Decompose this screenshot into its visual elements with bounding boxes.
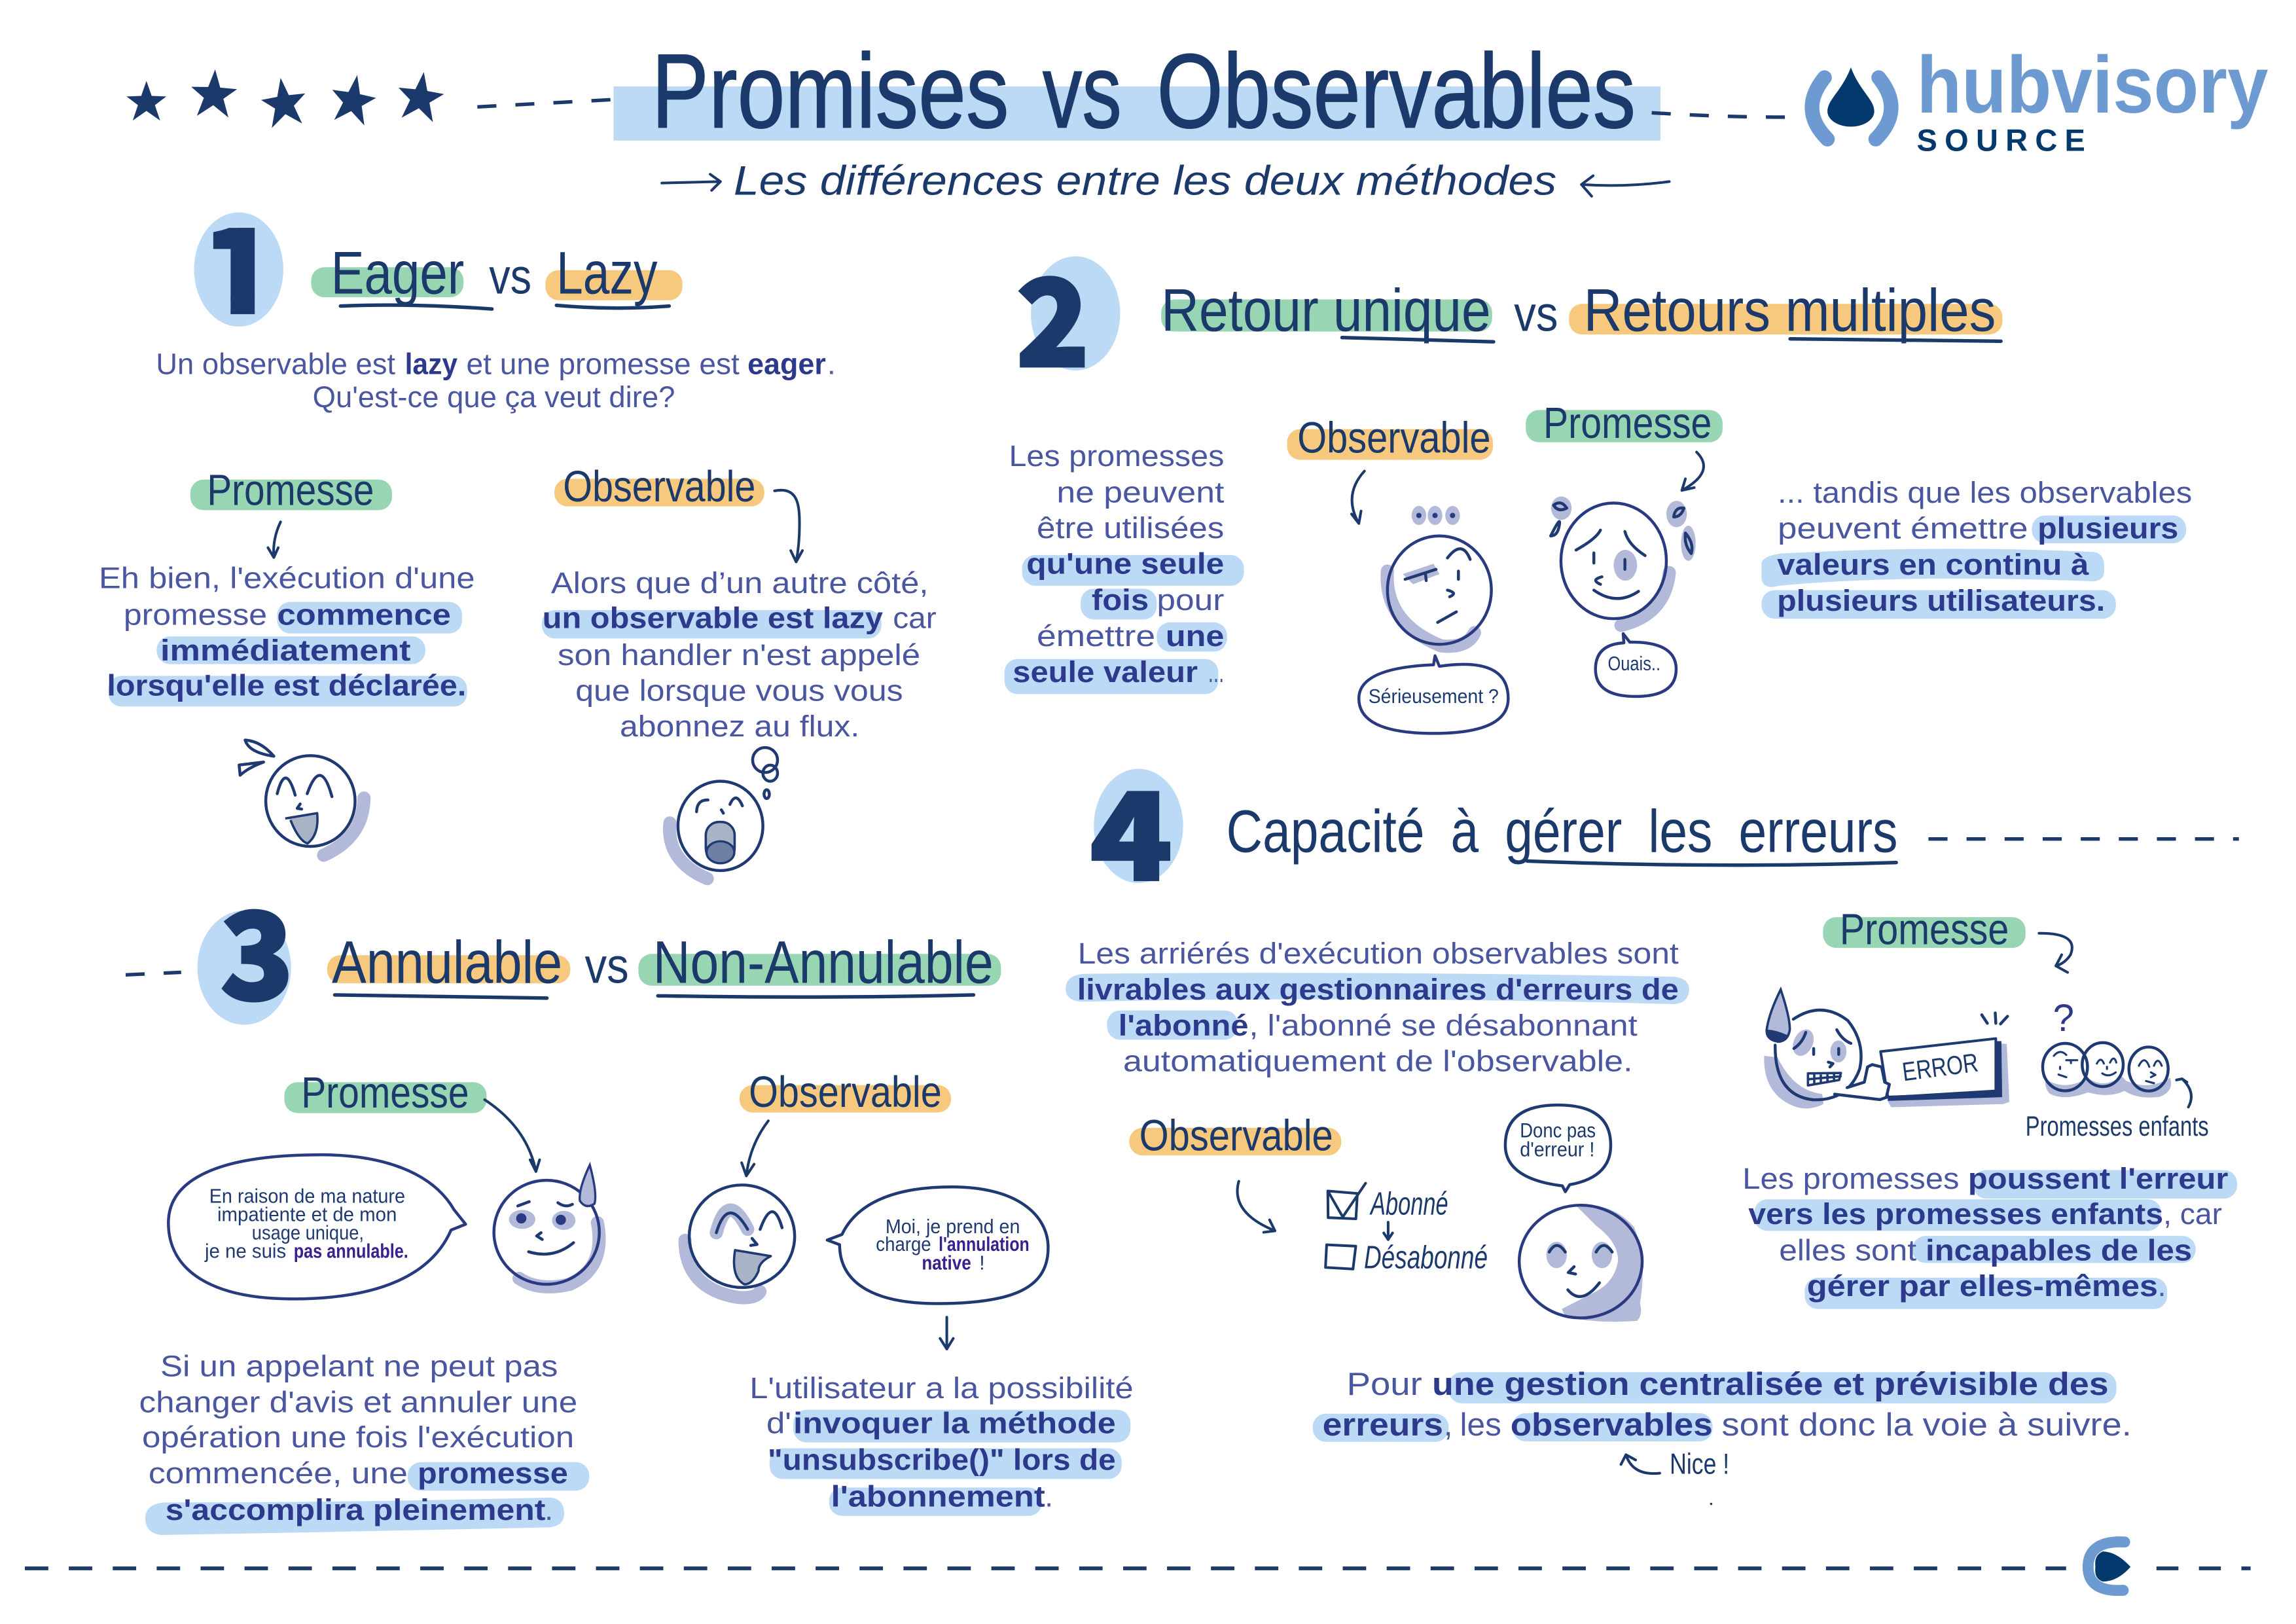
heading: retour unique vs retours multiples: Retours multiples [1584, 278, 1996, 344]
title: vs [1043, 33, 1122, 151]
text: observable lazy: Alors que d’un autre côté, [551, 566, 928, 600]
intro text: et une promesse est [467, 347, 740, 381]
label: promesses enfants: Promesses enfants [2026, 1111, 2209, 1142]
conclusion text: erreurs [1323, 1407, 1443, 1443]
tag: promesse: Promesse [207, 465, 374, 514]
heading: annulable vs non-annulable: Non-Annulable [653, 929, 994, 996]
text: observable lazy: car [893, 601, 937, 635]
text: promesse eager: commence [278, 597, 451, 631]
text: unsubscribe [749, 1371, 1134, 1516]
text: promesse s'accomplira: changer d'avis et annuler une [139, 1384, 577, 1418]
callout: annulation native [827, 1187, 1048, 1304]
text: promesses errors: elles sont [1779, 1233, 1916, 1267]
callout: annulation native: l'annulation [939, 1234, 1030, 1255]
text: unsubscribe: "unsubscribe()" lors de [768, 1442, 1116, 1476]
tag: observable: Observable [1297, 413, 1491, 462]
heading: eager vs lazy [311, 240, 683, 309]
heading: annulable vs non-annulable: vs [585, 939, 629, 994]
label: nice: Nice ! [1670, 1447, 1729, 1480]
arrow: callout to text [940, 1317, 953, 1349]
text: promesses errors: . [2158, 1269, 2166, 1303]
conclusion text: une gestion centralisée et prévisible des [1432, 1366, 2109, 1402]
text: unsubscribe: l'abonnement [831, 1479, 1045, 1513]
tag: promesse: Promesse [1840, 905, 2009, 954]
logo: small mark [2088, 1542, 2130, 1591]
intro text: eager [747, 347, 826, 381]
text: observables: ... tandis que les observables [1778, 475, 2192, 509]
text: observables: valeurs en continu à [1777, 547, 2089, 581]
heading: eager vs lazy: Eager [331, 240, 464, 307]
heading: retour unique vs retours multiples [1161, 278, 2002, 344]
text: observables [1761, 475, 2192, 619]
arrow: subtitle right [1581, 175, 1669, 196]
heading: retour unique vs retours multiples: Retour unique [1161, 278, 1491, 344]
tag: observable: Observable [563, 462, 755, 511]
number 2: 2 [1016, 226, 1089, 401]
text: promesses: fois [1092, 583, 1149, 617]
arrow: promesse to children [2039, 933, 2072, 972]
text: promesse eager: promesse [124, 597, 267, 631]
text: promesse s'accomplira [139, 1349, 589, 1535]
tag: observable: Observable [1139, 1111, 1333, 1161]
callout: serieusement: Sérieusement ? [1369, 686, 1499, 708]
heading: capacite a gerer les erreurs: Capacité à gérer les erreurs [1227, 799, 1897, 865]
tag: promesse: Promesse [301, 1068, 469, 1117]
text: observables: plusieurs [2037, 511, 2178, 545]
text: observables errors [1066, 936, 1689, 1078]
arrow: promesse to face [1682, 452, 1704, 490]
icon: skeptical face [1387, 506, 1492, 646]
title [652, 33, 1636, 151]
text: observables errors: livrables aux gestionnaires d'erreurs de [1077, 972, 1679, 1006]
text: promesses errors: gérer par elles-mêmes [1807, 1269, 2158, 1303]
checklist: abonne to desabonne [1325, 1183, 1488, 1276]
text: promesses errors: , car [2163, 1197, 2222, 1231]
heading: eager vs lazy: vs [489, 249, 531, 305]
text: promesse s'accomplira: promesse [418, 1456, 568, 1490]
conclusion text: les [1460, 1407, 1501, 1443]
text: promesses: ne peuvent [1056, 475, 1225, 509]
arrow: promesse to text [268, 522, 281, 558]
logo: hubvisory source [1812, 41, 2268, 157]
text: observable lazy: un observable est lazy [543, 601, 884, 635]
callout: annulation native: ! [979, 1252, 985, 1274]
text: promesses errors [1742, 1161, 2237, 1309]
text: promesses errors: poussent l'erreur [1968, 1161, 2229, 1195]
heading: retour unique vs retours multiples: vs [1514, 287, 1558, 342]
callout: pas annulable: usage unique, [252, 1223, 364, 1244]
text: promesses: émettre [1037, 619, 1155, 653]
title highlight [613, 86, 1660, 141]
number 1: 1 [205, 175, 278, 349]
intro text [156, 347, 836, 414]
checklist: abonne to desabonne: Désabonné [1364, 1240, 1488, 1276]
icon: sleepy yawning face [670, 748, 778, 878]
intro text: lazy [405, 347, 458, 381]
text: unsubscribe: d' [766, 1406, 791, 1439]
icon: tongue-out face [685, 1185, 795, 1297]
text: unsubscribe: L'utilisateur a la possibilité [749, 1371, 1134, 1405]
callout: donc pas d'erreur [1505, 1105, 1611, 1192]
title: Observables [1157, 33, 1636, 151]
logo: hubvisory source: SOURCE [1917, 122, 2085, 157]
text: promesses errors: incapables de les [1926, 1233, 2192, 1267]
text: observables: peuvent émettre [1778, 511, 2028, 545]
arrow: to child promises [2176, 1079, 2191, 1107]
arrow: promesse to face [485, 1100, 539, 1172]
icon: question mark: ? [2053, 997, 2074, 1039]
conclusion text: , [1444, 1407, 1453, 1443]
text: promesse s'accomplira: s'accomplira pleinement [166, 1492, 545, 1526]
callout: pas annulable [168, 1155, 465, 1299]
heading: annulable vs non-annulable: Annulable [332, 929, 562, 996]
text: promesse eager: immédiatement [160, 633, 411, 667]
text: promesses: une [1166, 619, 1224, 653]
footer [25, 1542, 2251, 1591]
callout: pas annulable: pas annulable. [294, 1240, 408, 1262]
panel: section 3 annulable vs non-annulable [126, 860, 1134, 1535]
text: promesse eager: Eh bien, l'exécution d'une [99, 561, 475, 595]
text: unsubscribe: invoquer la méthode [793, 1406, 1116, 1439]
heading: eager vs lazy: Lazy [556, 240, 658, 307]
callout: pas annulable: En raison de ma nature [209, 1185, 405, 1207]
conclusion text: observables [1511, 1407, 1713, 1443]
tag: observable: Observable [749, 1068, 942, 1117]
icon: three child promise faces [2043, 1043, 2171, 1098]
text: promesse eager: lorsqu'elle est déclarée. [107, 668, 466, 702]
text: promesses: seule valeur [1013, 655, 1198, 689]
number 3: 3 [221, 860, 293, 1034]
callout: donc pas d'erreur: d'erreur ! [1520, 1138, 1594, 1161]
number 1 [194, 212, 283, 327]
callout: annulation native: charge [876, 1234, 931, 1255]
callout: pas annulable: je ne suis [204, 1240, 286, 1262]
icon: worried face with error sign [1764, 990, 2009, 1108]
text: observable lazy: abonnez au flux. [620, 709, 859, 743]
arrow: observable to face [742, 1121, 768, 1176]
text: unsubscribe: . [1045, 1479, 1053, 1513]
intro text: Un observable est [156, 347, 395, 381]
conclusion text [1313, 1366, 2132, 1443]
icon: five stars [126, 68, 446, 129]
panel: section 1 eager vs lazy [99, 175, 937, 878]
callout: serieusement [1359, 656, 1508, 733]
text: observables errors: l'abonné [1119, 1008, 1248, 1042]
tag: promesse: Promesse [1543, 399, 1712, 448]
conclusion text: sont donc la voie à suivre. [1722, 1407, 2132, 1443]
text: promesses: qu'une seule [1026, 547, 1224, 581]
text: observables errors: automatiquement de l'observable. [1123, 1044, 1633, 1078]
text: promesses errors: Les promesses [1742, 1161, 1959, 1195]
number 4: 4 [1090, 741, 1172, 915]
panel: section 4 capacite a gerer les erreurs [1066, 741, 2239, 1505]
callout: donc pas d'erreur: Donc pas [1520, 1119, 1596, 1142]
text: observable lazy [542, 566, 937, 743]
icon: sweating smiling face [494, 1165, 600, 1287]
text: promesse s'accomplira: . [545, 1492, 553, 1526]
checklist: abonne to desabonne: Abonné [1369, 1185, 1448, 1221]
text: promesses [1005, 439, 1244, 694]
arrow: observable to face [1352, 471, 1365, 524]
icon: relieved face [1519, 1205, 1643, 1322]
icon: laughing face [239, 740, 364, 855]
callout: pas annulable: impatiente et de mon [217, 1204, 397, 1225]
text: promesse s'accomplira: Si un appelant ne peut pas [160, 1349, 558, 1383]
text: observables errors: , l'abonné se désabonnant [1249, 1008, 1638, 1042]
text: promesse s'accomplira: commencée, une [149, 1456, 408, 1490]
callout: ouais: Ouais.. [1607, 653, 1660, 675]
text: promesses: pour [1157, 583, 1224, 617]
icon: worried face with error sign: ERROR [1901, 1048, 1980, 1087]
intro text: . [827, 347, 836, 381]
heading: annulable vs non-annulable [327, 929, 1001, 998]
logo: hubvisory source: hubvisory [1917, 41, 2268, 130]
subtitle: Les différences entre les deux méthodes [734, 158, 1556, 204]
text: observable lazy: son handler n'est appelé [558, 638, 920, 672]
arrow: observable to checkboxes [1238, 1182, 1275, 1233]
header [126, 33, 2268, 204]
title: Promises [652, 33, 1009, 151]
arrow: observable to text [775, 490, 802, 562]
callout: annulation native: native [922, 1252, 971, 1274]
text: observables: plusieurs utilisateurs. [1777, 583, 2105, 617]
arrow: subtitle left [662, 174, 721, 190]
callout: annulation native: Moi, je prend en [886, 1216, 1020, 1238]
text: promesses: Les promesses [1009, 439, 1224, 473]
panel: section 2 retour unique vs retours multiples [1005, 226, 2192, 733]
icon: sad face [1551, 496, 1696, 625]
conclusion text: Pour [1347, 1366, 1422, 1402]
intro text: Qu'est-ce que ça veut dire? [313, 380, 675, 414]
text: observables errors: Les arriérés d'exécution observables sont [1078, 936, 1679, 970]
text: promesse s'accomplira: opération une fois l'exécution [142, 1420, 574, 1454]
text: promesses: ... [1208, 655, 1224, 689]
callout: ouais [1596, 634, 1676, 696]
text: promesses errors: vers les promesses enfants [1748, 1197, 2163, 1231]
text: promesse eager [99, 561, 475, 706]
text: observable lazy: que lorsque vous vous [575, 673, 903, 707]
text: promesses: être utilisées [1037, 511, 1224, 545]
arrow: nice [1621, 1454, 1660, 1473]
